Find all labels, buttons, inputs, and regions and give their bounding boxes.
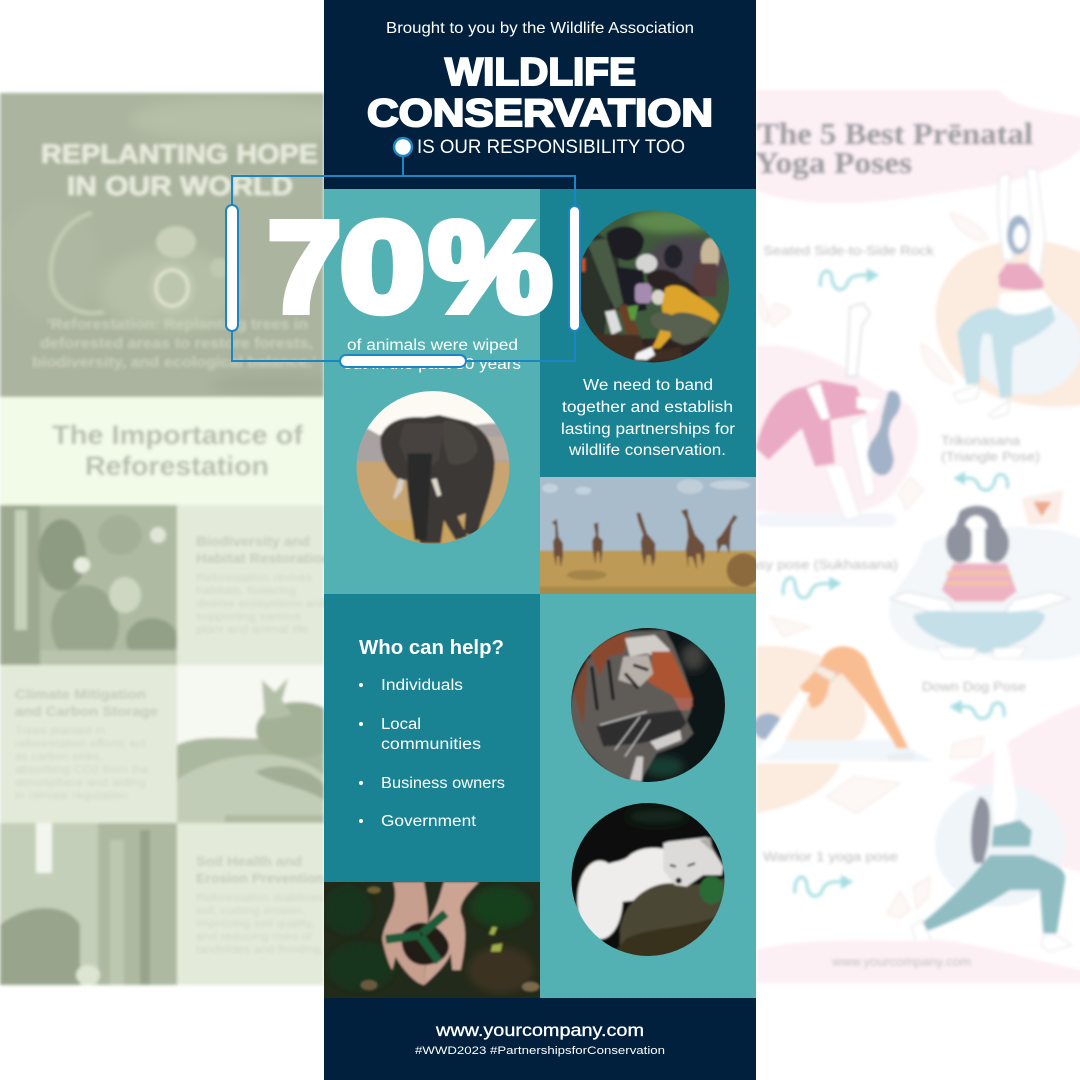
card backgrounds xyxy=(0,505,324,985)
body: biodiversity: diverse ecosystems and xyxy=(196,598,326,610)
statistic: 70 percent: 7 xyxy=(268,196,341,339)
footer band xyxy=(324,998,756,1080)
body: climate: absorbing CO2 from the xyxy=(15,764,149,776)
text card: climate: and Carbon Storage xyxy=(15,704,159,719)
pose labels: Down Dog Pose xyxy=(922,679,1026,694)
sub-panel: who can help xyxy=(324,594,540,882)
partnership message: together and establish xyxy=(562,399,733,416)
body: biodiversity: habitats, fostering xyxy=(196,585,296,597)
photo: hands holding soil and fern xyxy=(324,882,540,998)
panel: blurred background infographic on reforestation xyxy=(0,93,350,985)
bullet: individuals: Individuals xyxy=(381,677,463,694)
handle: bottom xyxy=(340,355,466,367)
body: soil: Reforestation stabilizes xyxy=(196,892,325,904)
body: climate: reforestation efforts act xyxy=(15,738,146,750)
bullet: local communities: Local xyxy=(381,716,421,733)
reforestation quote: deforested areas to restore forests, xyxy=(40,335,313,352)
heading: prenatal yoga poses: The 5 Best Prēnatal xyxy=(757,116,1033,151)
heading: replanting hope: IN OUR WORLD xyxy=(67,171,293,201)
handle: top circle xyxy=(394,138,412,156)
main title: CONSERVATION xyxy=(367,92,713,135)
pose labels: Easy pose (Sukhasana) xyxy=(740,557,898,572)
text card: climate: Climate Mitigation xyxy=(15,687,146,702)
photo: conservation volunteers planting xyxy=(581,210,729,362)
panel: blurred background infographic on prenatal yoga xyxy=(740,90,1080,983)
photo: giraffes on the savanna xyxy=(540,477,756,594)
photo: seedlings and people xyxy=(0,505,178,665)
squiggle arrow: easy pose xyxy=(783,578,830,598)
main title: WILDLIFE xyxy=(445,51,636,94)
pose labels: Trikonasana xyxy=(941,433,1021,448)
handle: left xyxy=(226,205,238,331)
body: soil: and reducing risks of xyxy=(196,931,313,943)
body: biodiversity: plant and animal life. xyxy=(196,624,312,636)
photo: elephant xyxy=(354,390,514,547)
pose labels xyxy=(740,243,1040,969)
frame rectangle xyxy=(232,176,575,361)
heading: prenatal yoga poses: Yoga Poses xyxy=(755,145,912,180)
heading: importance of reforestation: The Importance of xyxy=(52,420,304,450)
statistic: 70 percent: % xyxy=(429,196,552,339)
text card: soil: Soil Health and xyxy=(196,854,302,869)
pose labels: (Triangle Pose) xyxy=(941,449,1040,464)
sub-panel: animal portraits xyxy=(540,594,756,998)
partnership message: We need to band xyxy=(583,377,713,394)
body: soil: landslides and flooding. xyxy=(196,944,324,956)
illustration: upper half yoga poses xyxy=(756,90,1080,541)
handle: right xyxy=(569,206,580,331)
body: climate: as carbon sinks, xyxy=(15,751,103,763)
panel: main infographic column xyxy=(324,0,756,1080)
photo: hand holding seedling xyxy=(177,665,340,823)
bullet: local communities xyxy=(359,716,481,753)
photo: planting in soil xyxy=(0,823,177,985)
body: climate: atmosphere and aiding xyxy=(15,777,146,789)
heading: replanting hope: REPLANTING HOPE xyxy=(41,139,318,169)
squiggle arrow: triangle pose xyxy=(963,474,1008,490)
bullet: local communities: communities xyxy=(381,736,481,753)
photo: tiger xyxy=(571,628,725,782)
text card: biodiversity: Habitat Restoration xyxy=(196,551,331,566)
sub-panel: right dark teal xyxy=(540,189,756,477)
title block xyxy=(367,20,713,158)
partnership message: lasting partnerships for xyxy=(561,421,735,438)
squiggle arrow: warrior xyxy=(795,877,842,896)
body: biodiversity: supporting various xyxy=(196,611,302,623)
statistic caption: out in the past 50 years xyxy=(343,356,521,373)
body: soil: soil, curbing erosion, xyxy=(196,905,306,917)
body: climate: Trees planted in xyxy=(15,725,105,737)
hashtags: #WWD2023 #PartnershipsforConservation xyxy=(415,1045,665,1057)
header band xyxy=(324,0,756,189)
illustration: lower half yoga poses xyxy=(753,524,1080,983)
selection frame around statistic xyxy=(226,138,580,367)
pose labels: www.yourcompany.com xyxy=(831,954,971,969)
text card: biodiversity: Biodiversity and xyxy=(196,534,310,549)
body: climate: in climate regulation. xyxy=(15,790,131,802)
website: www.yourcompany.com xyxy=(435,1020,644,1040)
frame connector xyxy=(402,155,404,176)
heading: importance of reforestation: Reforestation xyxy=(85,451,269,481)
statistic: 70 percent: 0 xyxy=(340,196,425,339)
squiggle arrow: down dog xyxy=(960,703,1004,719)
footer text xyxy=(415,1020,665,1057)
pose labels: Warrior 1 yoga pose xyxy=(763,849,898,864)
who can help list xyxy=(359,637,505,830)
partnership message: wildlife conservation. xyxy=(568,442,726,459)
statistic caption: of animals were wiped xyxy=(347,337,518,354)
attribution line: Brought to you by the Wildlife Association xyxy=(386,20,694,37)
bullet: business owners: Business owners xyxy=(381,775,505,792)
importance band xyxy=(0,397,324,505)
squiggle arrow: seated rock xyxy=(820,271,867,290)
reforestation hero photo xyxy=(0,93,350,397)
sub-panel: left light teal xyxy=(324,189,540,594)
photo: arctic fox xyxy=(572,803,724,956)
pose labels: Seated Side-to-Side Rock xyxy=(763,243,935,258)
text card: soil: Erosion Prevention xyxy=(196,871,324,886)
list heading: Who can help? xyxy=(359,637,504,659)
reforestation quote: 'Reforestation: Replanting trees in xyxy=(47,316,308,333)
subtitle: IS OUR RESPONSIBILITY TOO xyxy=(417,137,685,158)
reforestation quote: biodiversity, and ecological balance.' xyxy=(32,354,316,371)
body: soil: improving soil quality, xyxy=(196,918,315,930)
body: biodiversity: Reforestation revives xyxy=(196,572,313,584)
bullet: government: Government xyxy=(381,813,477,830)
